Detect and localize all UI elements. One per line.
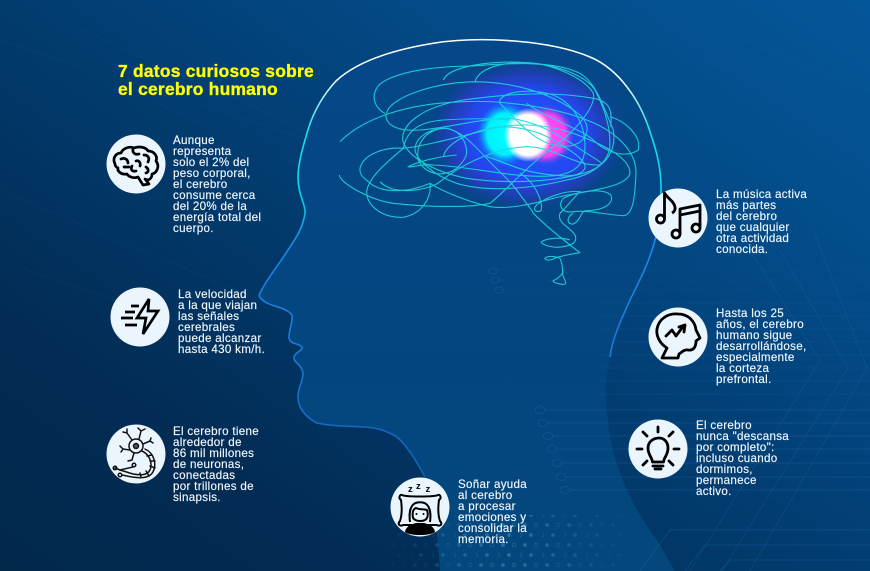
text: brain energy: peso corporal,: [173, 166, 251, 180]
panel: fact signal speed: [110, 288, 265, 356]
panel: fact development: [648, 306, 807, 386]
icon: brain: [106, 134, 166, 194]
brain glow: [427, 59, 627, 211]
text: brain energy: el cerebro: [173, 178, 228, 190]
text: neurons: por trillones de: [173, 480, 254, 492]
text: neurons: alrededor de: [173, 436, 242, 448]
title: el cerebro humano: [118, 79, 278, 99]
text: dreams: consolidar la: [458, 522, 527, 534]
text: music: conocida.: [716, 242, 768, 256]
text: development: Hasta los 25: [716, 306, 784, 320]
text: signal speed: hasta 430 km/h.: [178, 342, 265, 356]
icon: sleeping person on pillow: z: [416, 481, 421, 492]
text: signal speed: La velocidad: [178, 288, 247, 300]
head outline: [259, 40, 661, 477]
panel: fact never rests: [628, 418, 789, 498]
text: never rests: activo.: [696, 484, 732, 498]
text: brain energy: consume cerca: [173, 188, 256, 202]
text: development: desarrollándose,: [716, 340, 807, 352]
text: dreams: [458, 478, 527, 546]
icon: sleeping person on pillow: [390, 478, 450, 536]
text: dreams: emociones y: [458, 510, 526, 524]
text: brain energy: solo el 2% del: [173, 156, 249, 168]
text: brain energy: cuerpo.: [173, 222, 214, 234]
text: development: especialmente: [716, 350, 795, 364]
text: never rests: [696, 418, 789, 498]
text: signal speed: [178, 288, 265, 356]
head silhouette: [259, 40, 674, 571]
text: signal speed: cerebrales: [178, 320, 235, 334]
text: music: más partes: [716, 198, 776, 212]
text: development: [716, 306, 807, 386]
text: never rests: por completo":: [696, 440, 775, 454]
text: music: del cerebro: [716, 210, 777, 222]
icon: head with growth arrow: [648, 308, 708, 366]
text: brain energy: del 20% de la: [173, 200, 247, 212]
text: signal speed: las señales: [178, 310, 239, 322]
title: [118, 61, 314, 99]
diagonal light lines: [0, 0, 870, 330]
brain scribble: [339, 62, 639, 284]
text: brain energy: energía total del: [173, 210, 261, 224]
text: music: otra actividad: [716, 232, 789, 244]
panel: fact music: [648, 188, 807, 256]
text: neurons: [173, 424, 259, 504]
text: never rests: incluso cuando: [696, 452, 778, 464]
text: dreams: Soñar ayuda: [458, 478, 527, 490]
icon: music notes: [648, 188, 708, 248]
text: neurons: conectadas: [173, 468, 235, 482]
text: signal speed: a la que viajan: [178, 298, 257, 312]
text: dreams: al cerebro: [458, 488, 513, 502]
icon: sleeping person on pillow: z: [426, 484, 430, 495]
title: 7 datos curiosos sobre: [118, 61, 314, 81]
icon: sleeping person on pillow: z: [408, 484, 413, 495]
text: never rests: dormimos,: [696, 462, 753, 476]
text: neurons: 86 mil millones: [173, 446, 254, 460]
text: never rests: nunca "descansa: [696, 430, 789, 442]
text: brain energy: Aunque: [173, 134, 215, 146]
text: neurons: sinapsis.: [173, 490, 221, 504]
icon: neuron: [106, 424, 166, 484]
dotted pattern: [398, 515, 614, 567]
icon: light bulb: [628, 420, 688, 478]
icon: lightning bolt: [110, 288, 170, 346]
panel: fact dreams: [390, 478, 527, 546]
text: development: humano sigue: [716, 328, 792, 342]
text: neurons: de neuronas,: [173, 458, 244, 470]
text: development: la corteza: [716, 362, 769, 374]
text: neurons: El cerebro tiene: [173, 424, 259, 438]
text: dreams: a procesar: [458, 500, 516, 512]
text: brain energy: [172, 134, 261, 235]
circuit lines: [488, 230, 870, 571]
text: development: prefrontal.: [716, 372, 772, 386]
text: never rests: El cerebro: [696, 418, 752, 432]
panel: fact neurons: [106, 424, 259, 504]
text: signal speed: puede alcanzar: [178, 332, 261, 344]
background: head silhouette, circuits and brain: [258, 38, 870, 571]
panel: fact brain energy: [106, 134, 261, 235]
text: music: La música activa: [716, 188, 807, 200]
text: development: años, el cerebro: [716, 318, 804, 330]
text: never rests: permanece: [696, 474, 757, 486]
text: music: [716, 188, 807, 256]
text: dreams: memoria.: [458, 532, 509, 546]
text: music: que cualquier: [716, 220, 790, 234]
text: brain energy: representa: [173, 144, 231, 158]
